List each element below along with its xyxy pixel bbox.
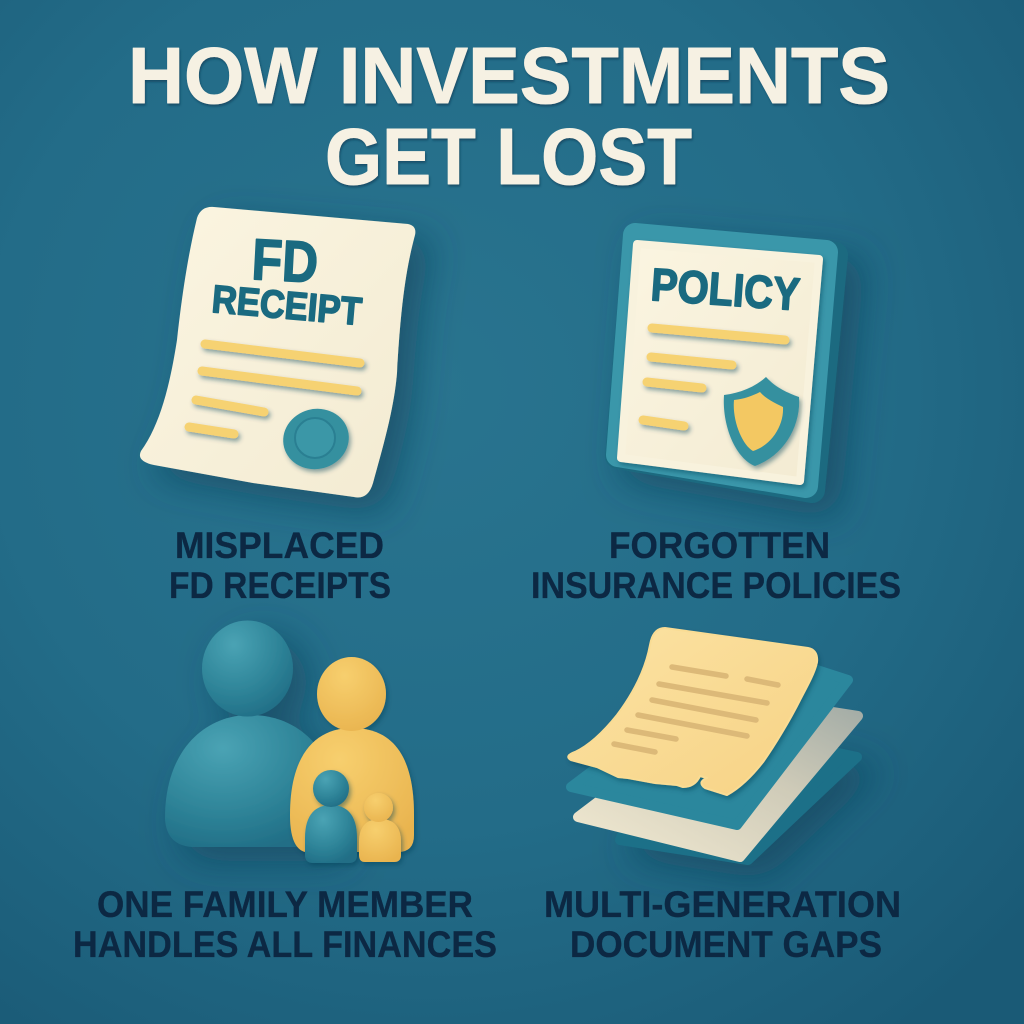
label xyxy=(73,884,497,965)
bottom dark sheet xyxy=(620,745,857,860)
label: INSURANCE POLICIES xyxy=(531,565,901,606)
cream sheet xyxy=(578,707,858,857)
title: GET LOST xyxy=(325,112,692,201)
label xyxy=(544,884,901,965)
adult teal figure xyxy=(165,620,330,847)
title xyxy=(128,31,890,201)
panel: one family member handles all finances xyxy=(73,620,497,965)
label: DOCUMENT GAPS xyxy=(570,924,882,965)
icon: FD receipt document xyxy=(140,207,415,497)
adult yellow figure xyxy=(290,657,414,852)
wax seal xyxy=(276,401,356,477)
receipt text lines xyxy=(189,344,360,434)
receipt heading xyxy=(210,227,364,334)
label: MISPLACED xyxy=(175,525,384,566)
page text lines xyxy=(614,667,778,752)
frame xyxy=(618,236,835,490)
icon: policy document xyxy=(618,235,835,490)
panel: multi-generation document gaps xyxy=(544,628,901,965)
label xyxy=(531,525,901,606)
label: ONE FAMILY MEMBER xyxy=(97,884,473,925)
policy heading: POLICY xyxy=(649,258,802,320)
panel: misplaced FD receipts xyxy=(140,207,415,606)
label: FD RECEIPTS xyxy=(169,565,391,606)
icon: family figures xyxy=(165,620,414,863)
panel: forgotten insurance policies xyxy=(531,235,901,606)
label: MULTI-GENERATION xyxy=(544,884,901,925)
icon: stack of papers xyxy=(568,628,858,860)
small yellow figure xyxy=(359,793,401,862)
teal sheet xyxy=(571,670,848,825)
label: HANDLES ALL FINANCES xyxy=(73,924,497,965)
policy sheet xyxy=(621,244,819,481)
icon: shield xyxy=(724,377,799,466)
title: HOW INVESTMENTS xyxy=(128,31,890,120)
small teal figure xyxy=(305,770,357,863)
label xyxy=(169,525,391,606)
policy text lines xyxy=(643,328,785,426)
receipt heading: RECEIPT xyxy=(210,278,364,334)
receipt heading: FD xyxy=(250,227,320,295)
torn yellow page xyxy=(568,628,817,795)
label: FORGOTTEN xyxy=(609,525,830,566)
